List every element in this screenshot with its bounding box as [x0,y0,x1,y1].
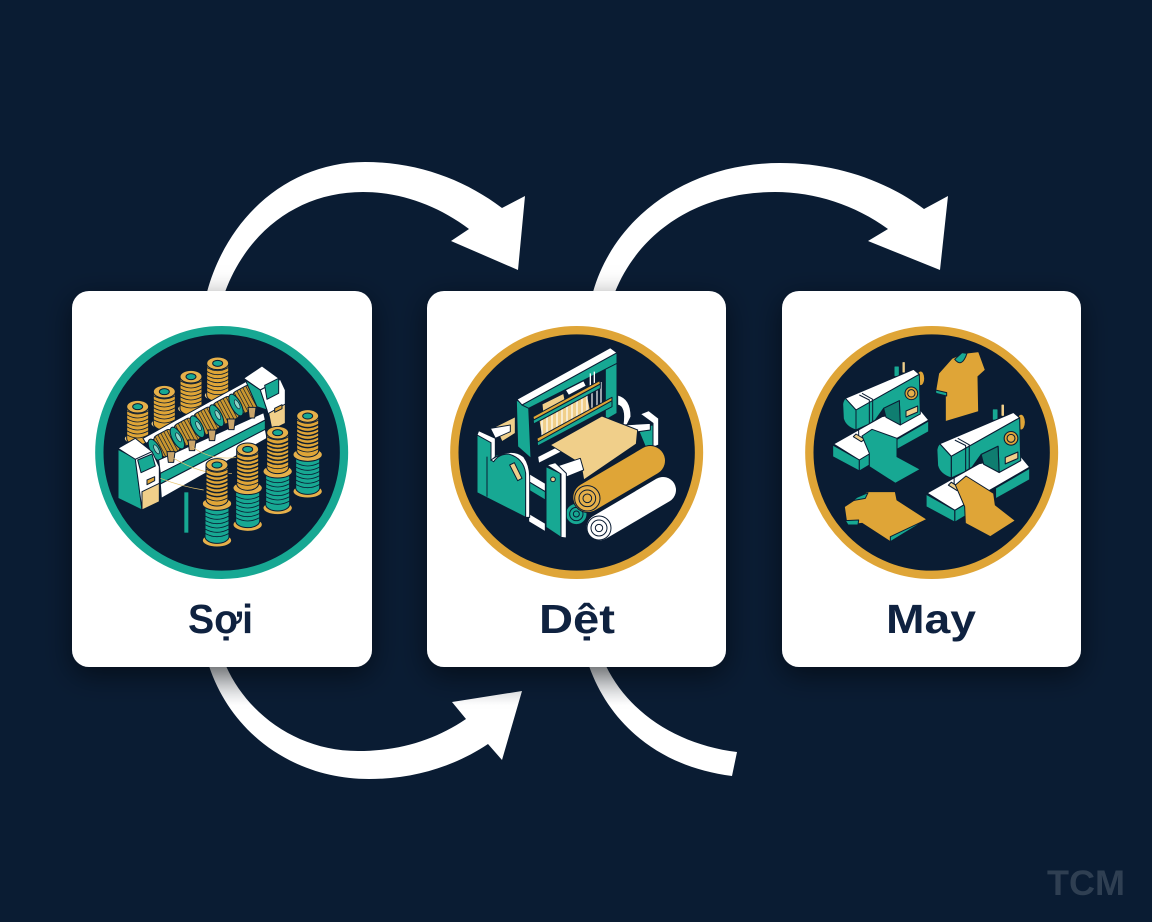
label: Sợi: Sợi [188,596,253,642]
watermark: TCM: TCM [1047,864,1125,903]
icon: sewing machines and garments [809,330,1054,575]
icon: weaving loom with fabric rolls [454,330,699,575]
label: Dệt: Dệt [539,596,615,642]
card: May [782,291,1081,667]
card: Dệt [427,291,726,667]
arrow: Dệt to May, top [593,163,948,292]
label: May: May [886,596,976,642]
arrow: Sợi to Dệt, bottom [209,666,522,779]
arrow: Sợi to Dệt, top [207,162,525,292]
icon: spinning machine with spools [99,330,344,575]
card background [72,291,372,667]
card background [782,291,1081,667]
card: Sợi [72,291,372,667]
arrow: Dệt onward, bottom [589,666,737,776]
card background [427,291,726,667]
